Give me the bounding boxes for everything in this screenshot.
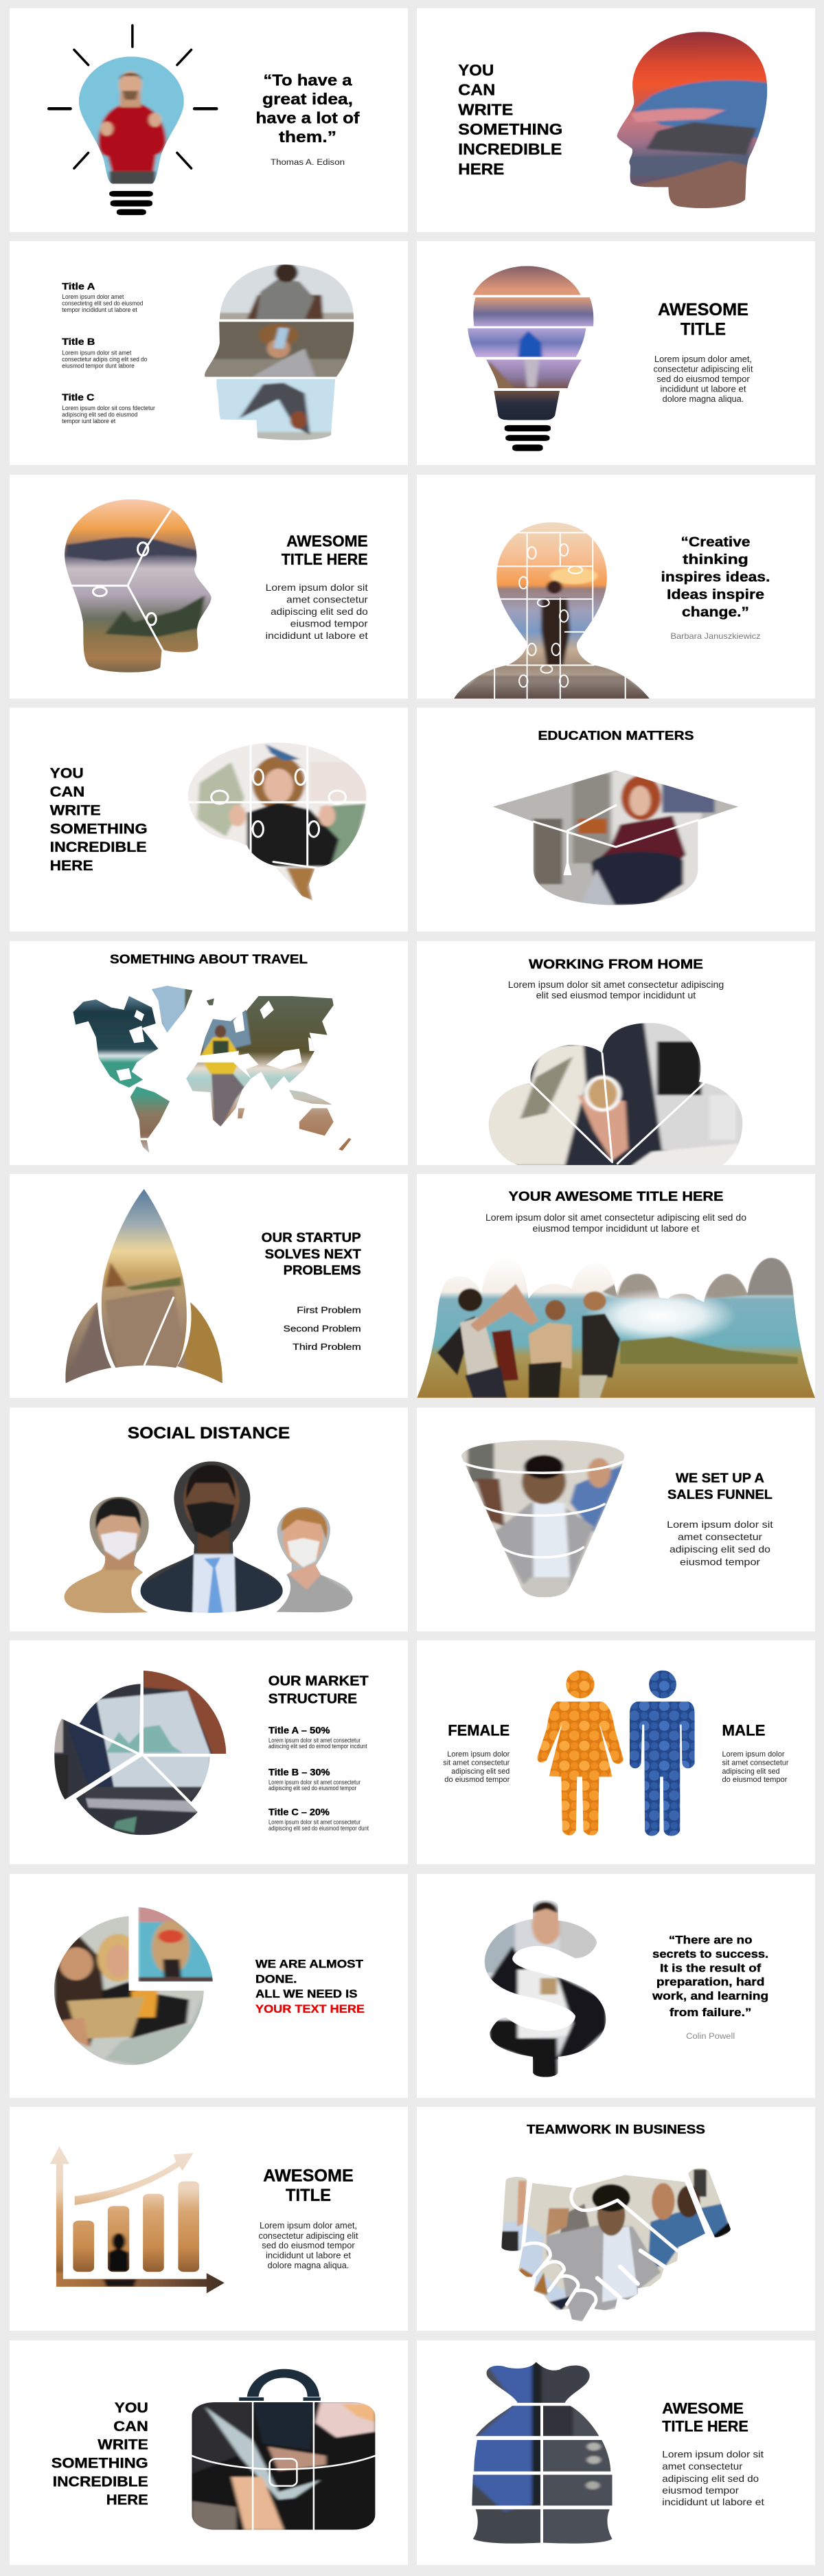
text block: Lorem ipsum dolor sit	[662, 2449, 764, 2460]
label: female: adipiscing elit sed	[451, 1767, 510, 1776]
heading: CAN	[113, 2419, 148, 2434]
panel: sales funnel	[417, 1408, 815, 1631]
heading: SOCIAL DISTANCE	[128, 1424, 290, 1443]
heading: SOMETHING	[50, 821, 148, 837]
quote: change.”	[682, 605, 749, 620]
heading	[658, 300, 748, 339]
dollar sign with businessman photo	[481, 1897, 610, 2080]
heading: AWESOME	[662, 2399, 744, 2417]
label: male: Lorem ipsum dolor	[722, 1750, 785, 1759]
quote: preparation, hard	[656, 1976, 764, 1988]
heading with red highlight: YOUR TEXT HERE	[255, 2002, 365, 2015]
problem list: Third Problem	[293, 1342, 361, 1352]
text block: Lorem ipsum dolor sit amet consectetur adipiscing	[508, 979, 724, 990]
text block: Lorem ipsum dolor sit amet consectetur adipiscing elit sed do	[485, 1212, 746, 1223]
pie with friends and pool photos	[50, 1906, 217, 2068]
text block	[266, 582, 368, 641]
panel: female and male	[417, 1640, 815, 1864]
panel: briefcase	[10, 2340, 408, 2565]
text block: title A: consectetng elit sed do eiusmod	[62, 300, 143, 306]
icon: sliced bulb with hiker	[462, 264, 599, 451]
text block: title C 20%: adipiscing elit sed do eiusmod tempor dunt	[268, 1824, 369, 1831]
text block: eiusmod tempor	[662, 2485, 739, 2496]
rocket with road photo	[60, 1188, 226, 1386]
heading: CAN	[50, 784, 84, 800]
text block: Lorem ipsum dolor sit	[667, 1519, 773, 1530]
text block: sed do eiusmod tempor	[262, 2241, 355, 2250]
text block: dolore magna aliqua.	[268, 2261, 349, 2270]
label: male	[722, 1721, 789, 1784]
heading	[52, 2400, 148, 2508]
text block: Lorem ipsum dolor amet,	[654, 354, 752, 364]
text block: title B: consectetur adipis cing elit sed do	[62, 356, 147, 363]
text block: title A 50%: adiiscing elit sed do eimod tempor incdunt	[268, 1743, 367, 1750]
heading: WRITE	[98, 2437, 148, 2453]
text block	[654, 354, 753, 404]
text block: Lorem ipsum dolor sit	[266, 582, 368, 593]
text block: title A: Title A	[62, 282, 95, 291]
text block: title C 20%: Title C – 20%	[268, 1807, 330, 1818]
text block: title A	[62, 282, 143, 313]
icon: female figure filled with oranges	[534, 1669, 628, 1840]
heading: YOUR AWESOME TITLE HERE	[508, 1190, 724, 1204]
text block: incididunt ut labore et	[661, 385, 746, 394]
briefcase with laptop photo	[190, 2368, 378, 2531]
label: male: adipiscing elit sed	[722, 1767, 780, 1776]
text block: consectetur adipiscing elit	[654, 365, 753, 374]
text block: incididunt ut labore et	[662, 2496, 764, 2507]
heading: STRUCTURE	[268, 1692, 357, 1707]
heading: YOU	[458, 61, 494, 79]
cloud with laptop and coffee photo	[483, 1021, 746, 1166]
panel: dollar sign quote	[417, 1874, 815, 2098]
panel: your awesome title here	[417, 1174, 816, 1399]
quote	[255, 71, 360, 146]
panel: head with sunset	[417, 8, 815, 232]
heading: YOU	[115, 2400, 148, 2416]
text block: consectetur adipiscing elit	[258, 2231, 358, 2241]
text block: eiusmod tempor	[680, 1557, 760, 1568]
text block: eiusmod tempor	[290, 618, 368, 629]
speech bubble with woman photo and puzzle seams	[184, 740, 371, 903]
text block: sed do eiusmod tempor	[656, 374, 750, 384]
pie chart with dashboard photo	[50, 1669, 228, 1836]
label: female: sit amet consectetur	[443, 1759, 510, 1767]
panel: head in three slices	[10, 241, 408, 465]
text block: title B 30%: Title B – 30%	[268, 1767, 330, 1778]
person silhouette with beach photo and puzzle grid	[452, 521, 652, 699]
heading: TITLE	[286, 2186, 331, 2205]
quote: “Creative	[681, 534, 750, 550]
text block: title A 50%: Lorem ipsum dolor sit amet consectetur	[268, 1737, 360, 1743]
heading	[262, 1231, 361, 1278]
problem list: Second Problem	[284, 1323, 361, 1334]
text block	[662, 2449, 764, 2507]
money bag silhouette with suit photo	[468, 2359, 620, 2546]
label: female: FEMALE	[448, 1721, 510, 1739]
quote author: Thomas A. Edison	[271, 159, 345, 167]
heading: WORKING FROM HOME	[529, 958, 703, 972]
person: man right	[275, 1506, 354, 1614]
text block: title B: eiusmod tempor dunt labore	[62, 363, 135, 370]
heading: HERE	[106, 2492, 148, 2508]
heading: OUR MARKET	[268, 1674, 369, 1689]
mountain skyline with hikers photo	[417, 1256, 816, 1399]
text block: title A 50%	[268, 1725, 367, 1750]
heading: WE SET UP A	[676, 1471, 764, 1486]
panel: money bag with tie and suit	[417, 2340, 815, 2565]
heading: SOMETHING ABOUT TRAVEL	[110, 952, 308, 966]
heading: EDUCATION MATTERS	[538, 729, 694, 743]
text block: title A: Lorem ipsum dolor amet	[62, 293, 124, 300]
problem list	[284, 1305, 361, 1352]
text block: adipiscing elit sed do	[662, 2473, 759, 2484]
heading: INCREDIBLE	[53, 2474, 148, 2489]
text block: title C	[62, 392, 155, 425]
panel: teamwork in business	[417, 2107, 815, 2331]
quote: “To have a	[264, 71, 352, 89]
heading with red highlight: DONE.	[255, 1973, 297, 1985]
handshake with team photo	[499, 2166, 733, 2324]
text block	[485, 1212, 746, 1234]
text block: incididunt ut labore et	[266, 630, 368, 641]
text block: amet consectetur	[286, 594, 368, 605]
quote: Ideas inspire	[667, 587, 764, 602]
panel: speech bubble puzzle	[10, 708, 408, 931]
panel: bulb in slices	[417, 241, 815, 465]
heading: AWESOME	[263, 2166, 354, 2185]
quote: thinking	[683, 552, 748, 567]
funnel with team photo	[457, 1438, 630, 1599]
panel: quote with light bulb	[10, 8, 408, 232]
text block: title B	[62, 337, 147, 370]
text block: title B 30%: adipiscing elit sed do eiusmod tempor	[268, 1785, 356, 1792]
quote: from failure.”	[670, 2007, 751, 2019]
heading: SOLVES NEXT	[265, 1247, 361, 1262]
text block: eiusmod tempor incididunt ut labore et	[533, 1223, 700, 1234]
quote: “There are no	[669, 1934, 753, 1946]
heading	[667, 1471, 772, 1502]
panel: education matters	[417, 708, 815, 931]
heading: TEAMWORK IN BUSINESS	[527, 2123, 705, 2136]
quote author: Colin Powell	[686, 2033, 735, 2041]
panel: growth chart	[10, 2107, 408, 2331]
panel: working from home	[417, 941, 815, 1166]
panel: puzzle person quote	[417, 475, 815, 699]
text block: title C: Lorem ipsum dolor sit cons fdectetur	[62, 405, 155, 411]
heading	[458, 61, 562, 178]
three masked people silhouettes	[62, 1460, 354, 1615]
heading with red highlight	[255, 1957, 365, 2015]
person: woman	[62, 1495, 152, 1615]
text block: title B: Lorem ipsum dolor sit amet	[62, 349, 132, 356]
text block: title C 20%	[268, 1807, 369, 1831]
heading: YOU	[50, 766, 84, 782]
heading	[282, 532, 368, 568]
heading: INCREDIBLE	[458, 140, 562, 158]
head made of three photo slices	[200, 262, 357, 443]
heading with red highlight: ALL WE NEED IS	[255, 1987, 357, 2000]
label: male: do eiusmod tempor	[722, 1776, 788, 1784]
panel: puzzle head	[10, 475, 408, 699]
text block: adipiscing elit sed do	[670, 1544, 770, 1555]
quote: inspires ideas.	[661, 570, 770, 585]
heading: AWESOME	[658, 300, 748, 319]
text block: elit sed eiusmod tempor incididunt ut	[536, 990, 696, 1001]
panel: market structure	[10, 1640, 408, 1864]
head silhouette with misty landscape and puzzle seams	[60, 497, 216, 676]
panel: almost done pie	[10, 1874, 408, 2098]
heading	[50, 766, 148, 874]
heading: CAN	[458, 81, 495, 99]
heading: WRITE	[50, 802, 101, 819]
text block: title B 30%	[268, 1767, 360, 1792]
quote	[661, 534, 770, 620]
text block: title C: Title C	[62, 392, 95, 403]
problem list: First Problem	[297, 1305, 361, 1315]
panel: startup rocket	[10, 1174, 408, 1398]
panel: something about travel	[10, 941, 408, 1165]
icon: light bulb with man in red sweater	[49, 25, 216, 215]
text block	[667, 1519, 773, 1568]
quote author: Barbara Januszkiewicz	[670, 631, 761, 641]
heading	[263, 2166, 354, 2205]
heading: WRITE	[458, 100, 513, 118]
text block: adipiscing elit sed do	[271, 606, 368, 617]
text block: dolore magna aliqua.	[663, 394, 744, 404]
heading: TITLE	[680, 320, 726, 339]
quote: work, and learning	[652, 1990, 768, 2002]
world map with traveller photo	[65, 984, 355, 1154]
heading: INCREDIBLE	[50, 839, 147, 855]
text block	[508, 979, 724, 1001]
quote: have a lot of	[255, 109, 360, 126]
text block: title C 20%: Lorem ipsum dolor sit amet consectetur	[268, 1819, 360, 1826]
text block: title C: adipiscing elit sed do eiusmod	[62, 411, 137, 418]
heading: SALES FUNNEL	[667, 1488, 772, 1502]
panel: social distance	[10, 1408, 408, 1631]
heading: HERE	[458, 160, 504, 178]
bar chart with arrows and sunset photo	[47, 2144, 229, 2296]
heading: AWESOME	[286, 532, 368, 550]
heading: TITLE HERE	[662, 2417, 748, 2434]
graduation cap with student photo	[489, 768, 741, 908]
text block: incididunt ut labore et	[266, 2251, 352, 2261]
heading: PROBLEMS	[284, 1264, 361, 1278]
heading: OUR STARTUP	[262, 1231, 361, 1245]
heading: SOMETHING	[458, 120, 562, 138]
heading	[662, 2399, 748, 2434]
quote	[652, 1934, 768, 2019]
text block: title C: tempor iunt labore et	[62, 418, 116, 425]
heading: SOMETHING	[52, 2456, 148, 2472]
person: man centre	[138, 1460, 285, 1614]
text block: title A 50%: Title A – 50%	[268, 1725, 330, 1736]
heading: TITLE HERE	[282, 550, 368, 568]
heading with red highlight: WE ARE ALMOST	[255, 1957, 364, 1970]
heading: HERE	[50, 858, 93, 874]
label: male: MALE	[722, 1721, 765, 1739]
text block: title A: tempor incididunt ut labore et	[62, 306, 137, 313]
text block	[258, 2221, 358, 2270]
text block: amet consectetur	[678, 1531, 762, 1542]
label: female	[443, 1721, 510, 1784]
quote: It is the result of	[660, 1962, 762, 1974]
heading	[268, 1674, 369, 1707]
quote: great idea,	[262, 90, 353, 108]
quote: secrets to success.	[652, 1948, 768, 1961]
text block: Lorem ipsum dolor amet,	[260, 2221, 357, 2230]
label: female: Lorem ipsum dolor	[447, 1750, 510, 1759]
text block: amet consectetur	[662, 2461, 743, 2472]
text block: title B 30%: Lorem ipsum dolor sit amet consectetur	[268, 1778, 360, 1785]
label: male: sit amet consectetur	[722, 1759, 789, 1767]
quote: them.”	[279, 128, 336, 146]
head silhouette with sunset photo	[613, 30, 772, 212]
text block: title B: Title B	[62, 337, 95, 347]
icon: male figure filled with blueberries	[626, 1669, 699, 1840]
label: female: do eiusmod tempor	[444, 1776, 510, 1784]
